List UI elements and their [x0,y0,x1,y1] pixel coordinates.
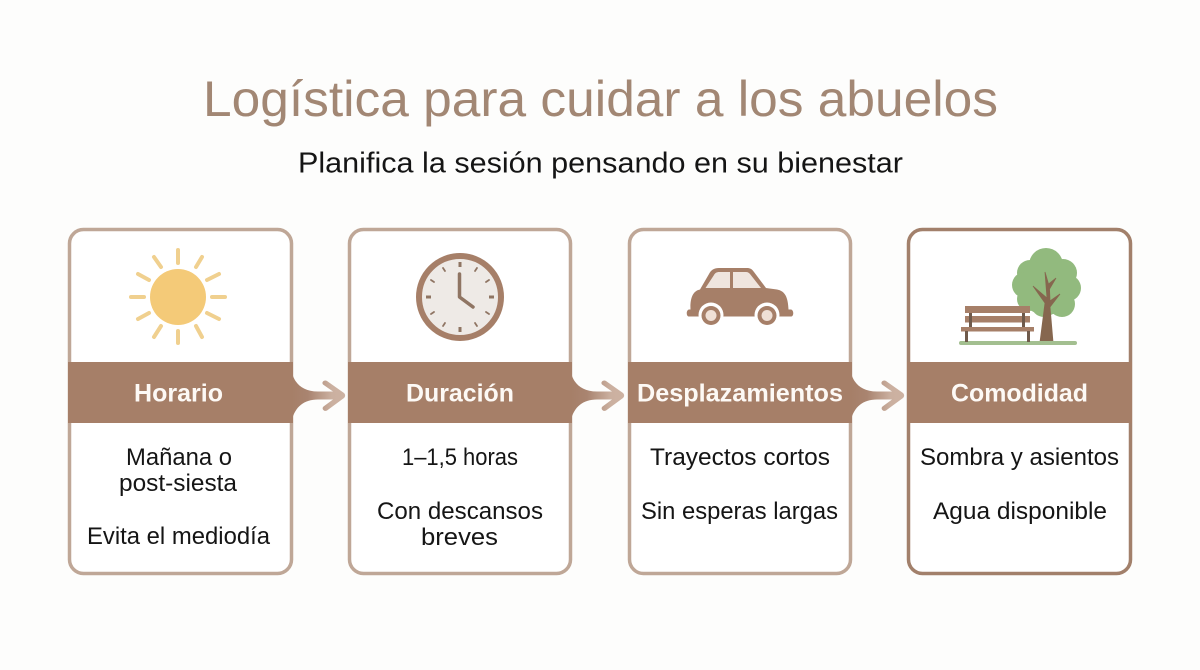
tree trunk [1033,272,1060,342]
body text: post-siesta [119,470,237,497]
icon: car [687,268,793,328]
body text [641,444,838,525]
body text: Evita el mediodía [87,523,270,550]
icon: clock [419,256,501,338]
header band [348,362,572,423]
heading: Comodidad [951,380,1088,408]
heading: Horario [134,380,223,408]
title: Logística para cuidar a los abuelos [203,71,998,127]
tree crown [1012,248,1081,317]
panel: Desplazamientos [628,230,852,574]
body text [920,444,1119,525]
header band [68,362,293,423]
ground [959,341,1077,345]
card frame [908,230,1130,574]
heading: Desplazamientos [637,380,843,408]
subtitle: Planifica la sesión pensando en su bienestar [298,148,903,180]
body text: Sin esperas largas [641,498,838,525]
body text: Trayectos cortos [650,444,830,471]
card frame [350,230,570,574]
body text [87,444,270,550]
header band [907,362,1132,423]
body text [377,444,543,551]
body text: Sombra y asientos [920,444,1119,471]
bench [961,306,1034,332]
body text: breves [421,524,498,551]
panel: Horario [68,230,293,574]
arrow: Desplazamientos to Comodidad [851,373,904,420]
card frame [630,230,850,574]
panel: Duración [348,230,572,574]
arrow: Horario to Duración [292,373,345,420]
heading: Duración [406,380,514,408]
icon: bench and tree [959,248,1081,345]
body text: Agua disponible [933,498,1107,525]
icon: sun [131,250,225,343]
body text: 1–1,5 horas [402,444,518,471]
arrow: Duración to Desplazamientos [571,373,624,420]
body text: Con descansos [377,498,543,525]
header band [628,362,852,423]
panel: Comodidad [907,230,1132,574]
card frame [70,230,292,574]
body text: Mañana o [126,444,232,471]
